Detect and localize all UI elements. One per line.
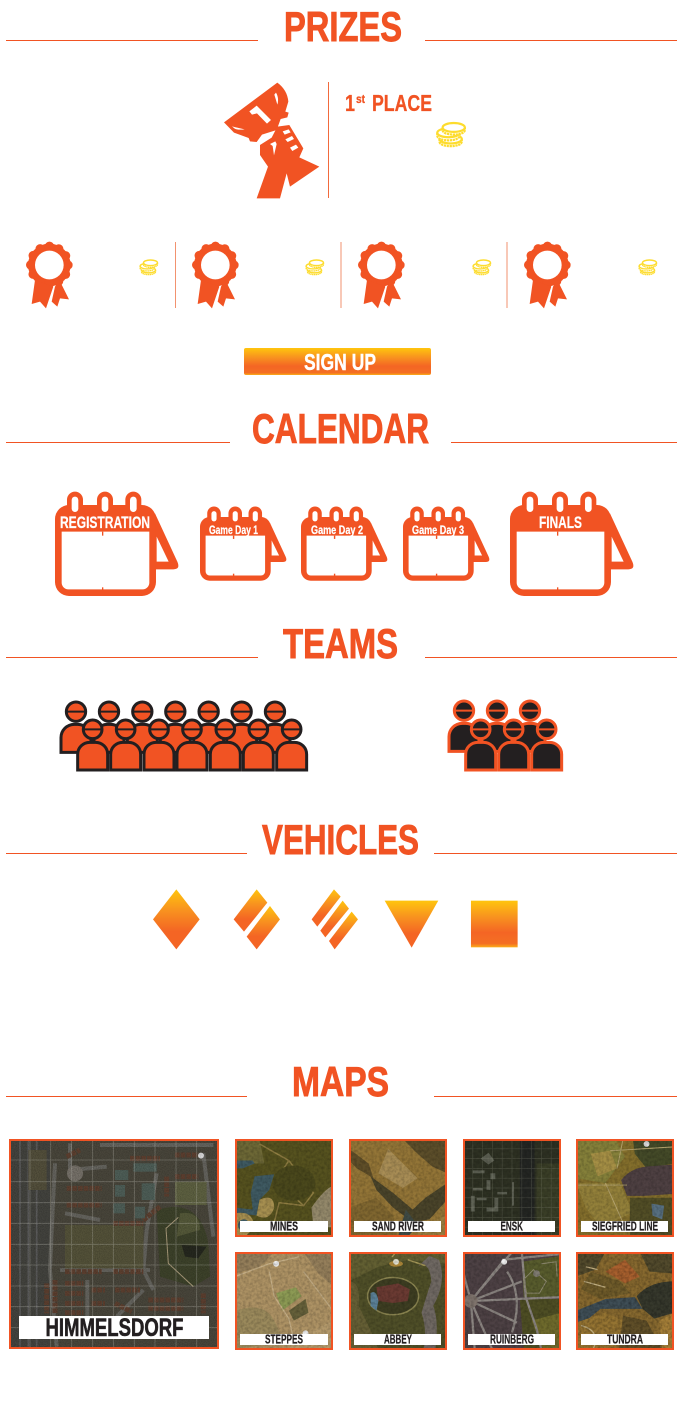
- icon: medium tank: [234, 889, 280, 949]
- first place label: 1: [345, 90, 355, 116]
- map: sand river: [349, 1139, 447, 1237]
- map: mines: MINES: [270, 1220, 298, 1234]
- runner-up prize 4: [526, 244, 656, 308]
- icon: light tank: [153, 889, 200, 949]
- map: tundra: TUNDRA: [607, 1332, 643, 1346]
- map: himmelsdorf: [9, 1139, 219, 1350]
- prize row: [28, 244, 656, 308]
- map: steppes: STEPPES: [265, 1332, 303, 1346]
- map: tundra: [576, 1252, 674, 1350]
- map: abbey: ABBEY: [384, 1332, 412, 1346]
- section: maps: [6, 1058, 677, 1350]
- map: steppes: [235, 1252, 333, 1350]
- calendar: game day 3: Game Day 3: [412, 523, 464, 537]
- heading: vehicles: VEHICLES: [262, 816, 419, 863]
- calendar: registration: [55, 492, 178, 596]
- section: teams: [6, 620, 677, 770]
- section: vehicles: [6, 816, 677, 949]
- icon: coins first place: [437, 123, 465, 146]
- map: himmelsdorf: HIMMELSDORF: [46, 1314, 184, 1342]
- heading: teams: TEAMS: [283, 620, 398, 667]
- calendar: registration: REGISTRATION: [60, 514, 150, 532]
- first place label: PLACE: [372, 90, 432, 116]
- calendar: game day 3: [403, 506, 489, 581]
- icon: heavy tank: [312, 889, 358, 949]
- map: mines: [235, 1139, 333, 1237]
- icon: artillery: [471, 901, 518, 947]
- map: abbey: [349, 1252, 447, 1350]
- first place label: st: [356, 92, 365, 106]
- button: sign up: SIGN UP: [304, 349, 376, 375]
- team group: orange players: [61, 702, 307, 770]
- runner-up prize 1: [28, 244, 157, 308]
- team group: dark players: [449, 701, 562, 770]
- map: ruinberg: [463, 1252, 561, 1350]
- calendar: game day 1: Game Day 1: [209, 523, 258, 537]
- vehicle classes: [153, 889, 518, 949]
- icon: trophy in fist: [224, 83, 319, 198]
- button: sign up: [244, 348, 431, 375]
- map: sand river: SAND RIVER: [372, 1220, 424, 1234]
- calendar: game day 2: Game Day 2: [311, 523, 363, 537]
- first place label: [345, 90, 432, 116]
- calendar: finals: [510, 492, 633, 596]
- prize dividers: [176, 242, 507, 308]
- calendar: game day 2: [301, 506, 387, 581]
- map: siegfried line: [576, 1139, 674, 1237]
- icon: tank destroyer: [385, 901, 438, 948]
- calendar: finals: FINALS: [539, 514, 582, 532]
- divider: [328, 82, 330, 198]
- calendar: game day 1: [200, 506, 286, 581]
- heading: maps: MAPS: [292, 1058, 389, 1105]
- section: prizes: [6, 3, 677, 375]
- heading: prizes: PRIZES: [284, 3, 402, 50]
- map: ensk: [463, 1139, 561, 1237]
- heading: calendar: CALENDAR: [252, 405, 429, 452]
- section: calendar: [6, 405, 677, 596]
- map: ensk: ENSK: [500, 1220, 523, 1234]
- runner-up prize 3: [360, 244, 490, 308]
- runner-up prize 2: [194, 244, 323, 308]
- map: ruinberg: RUINBERG: [490, 1332, 534, 1346]
